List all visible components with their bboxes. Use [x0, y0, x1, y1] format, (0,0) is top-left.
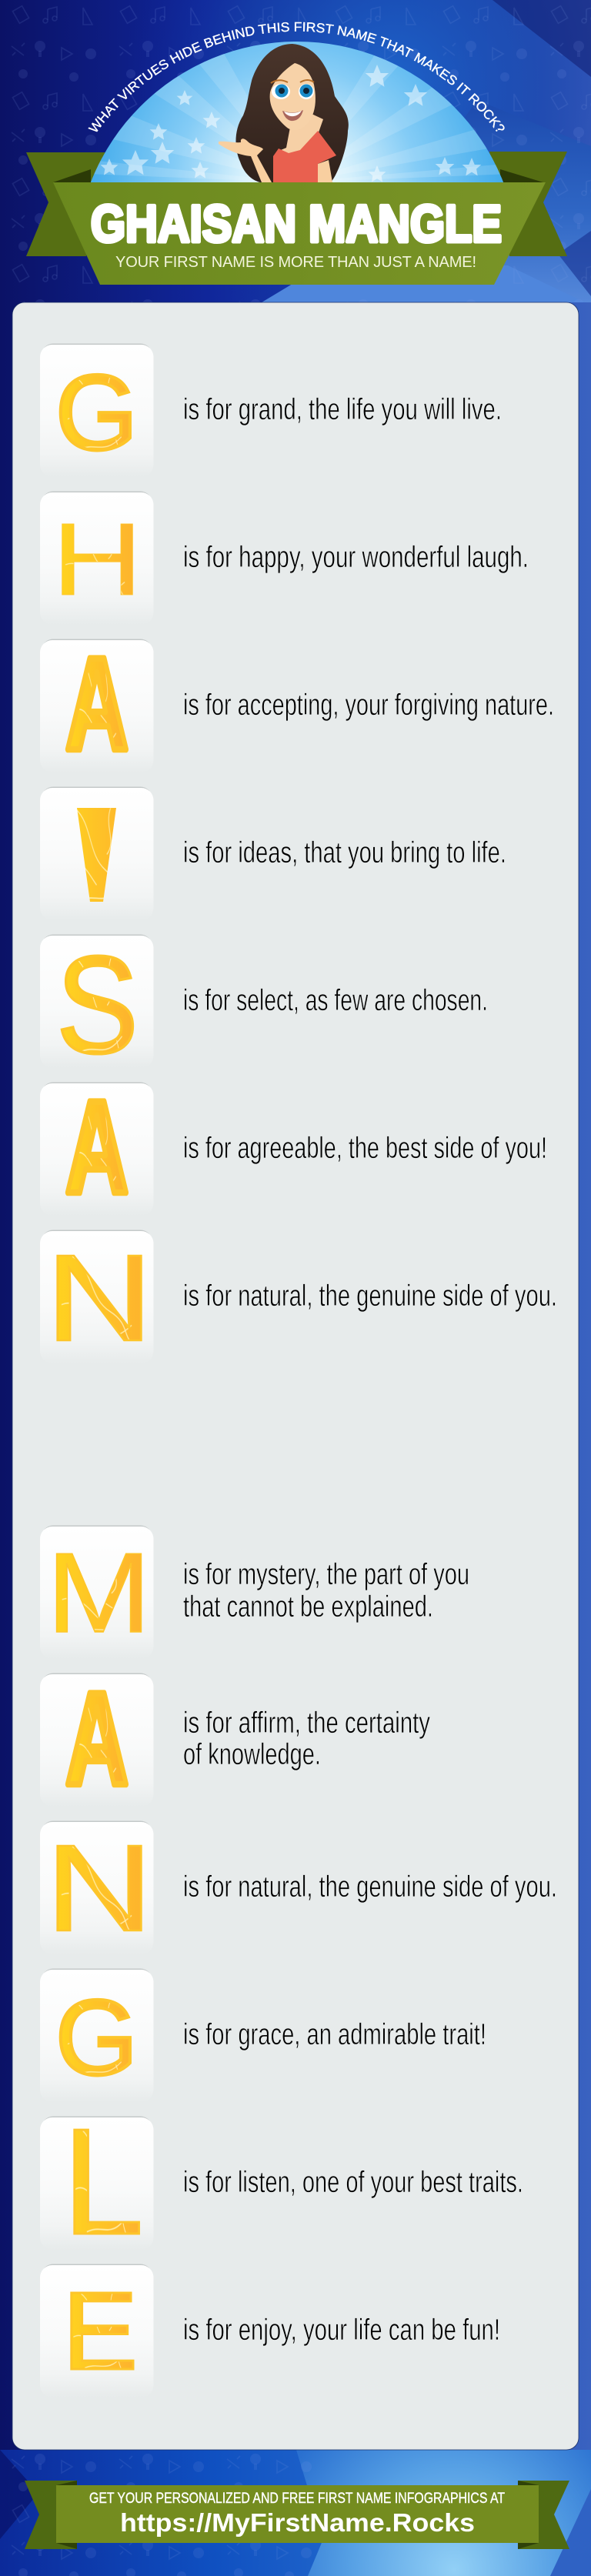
- banner subtitle: YOUR FIRST NAME IS MORE THAN JUST A NAME!: [115, 254, 476, 271]
- row: N is for natural: [40, 1819, 557, 1957]
- character: face: [270, 63, 316, 130]
- row: E is for enjoy: [40, 2264, 500, 2397]
- row: A is for affirm: [40, 1664, 430, 1813]
- footer banner: [25, 2481, 569, 2549]
- letter S: S: [56, 928, 139, 1083]
- footer line 1: GET YOUR PERSONALIZED AND FREE FIRST NAME INFOGRAPHICS AT: [89, 2491, 505, 2507]
- letter H: H: [52, 501, 143, 617]
- footer url: https://MyFirstName.Rocks: [120, 2508, 475, 2537]
- panel: [12, 302, 579, 2450]
- character: hand and arm left: [219, 138, 272, 182]
- letter G: G: [55, 354, 138, 472]
- row: L is for listen: [40, 2097, 523, 2266]
- character: top: [273, 131, 336, 182]
- letter L: L: [62, 2097, 144, 2266]
- row: N is for natural: [40, 1229, 557, 1366]
- footer ribbon right: [518, 2481, 569, 2549]
- character: arm right: [318, 160, 332, 182]
- text: is for affirm, the certainty: [183, 1707, 430, 1740]
- back ribbon: left: [26, 152, 108, 256]
- letter A: A: [65, 629, 129, 778]
- letter A: A: [65, 1073, 129, 1221]
- text: is for grace, an admirable trait!: [183, 2018, 486, 2051]
- illustration: dome with character: [91, 42, 503, 182]
- character: neck and chest: [277, 114, 323, 160]
- text line 2: of knowledge.: [183, 1738, 321, 1771]
- letter N: N: [45, 1819, 153, 1957]
- footer ribbon left: [25, 2481, 77, 2549]
- row: A is for agreeable: [40, 1073, 547, 1221]
- sunburst dome: [91, 42, 503, 182]
- letter E: E: [62, 2269, 138, 2393]
- text line 2: that cannot be explained.: [183, 1590, 433, 1623]
- text: is for select, as few are chosen.: [183, 984, 488, 1017]
- row: M is for mystery: [40, 1525, 469, 1659]
- footer front: [56, 2485, 539, 2543]
- letter A: A: [65, 1664, 129, 1813]
- character: mouth: [282, 110, 303, 121]
- letter I: I: [54, 778, 139, 931]
- character: eyes: [271, 80, 314, 99]
- row: H is for happy: [40, 491, 529, 625]
- banner: [53, 182, 546, 285]
- letter M: M: [46, 1530, 152, 1657]
- letter G: G: [55, 1979, 138, 2097]
- banner title: GHAISAN MANGLE: [91, 195, 502, 253]
- character: hair: [235, 44, 349, 182]
- back ribbon: right: [489, 152, 567, 256]
- text: is for mystery, the part of you: [183, 1558, 469, 1591]
- banner front: [53, 182, 546, 285]
- row: S is for select: [40, 928, 488, 1083]
- row: G is for grand: [40, 343, 502, 477]
- letter N: N: [45, 1229, 153, 1366]
- row: I is for ideas: [40, 778, 506, 931]
- curved heading: WHAT VIRTUES HIDE BEHIND THIS FIRST NAME THAT MAKES IT ROCK?: [88, 22, 505, 132]
- row: A is for accepting: [40, 629, 554, 778]
- row: G is for grace: [40, 1968, 486, 2102]
